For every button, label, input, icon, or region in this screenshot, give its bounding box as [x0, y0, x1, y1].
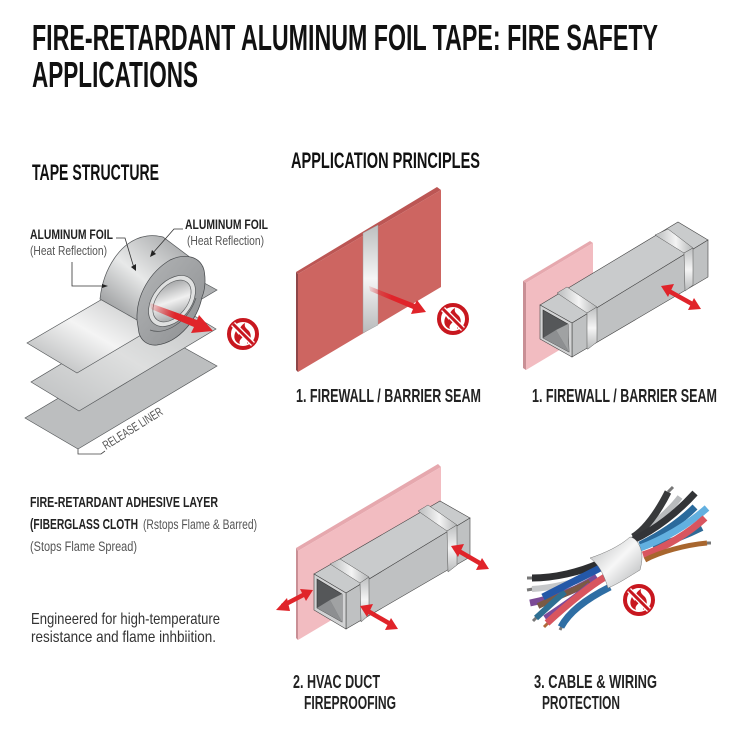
tape sleeve: [590, 537, 642, 588]
callout: aluminum foil right: ALUMINUM FOIL: [185, 216, 268, 232]
label: [534, 672, 657, 713]
tape bands: [330, 505, 457, 622]
arrow: right: [451, 544, 489, 570]
callout: aluminum foil left: [30, 226, 136, 288]
label: PROTECTION: [542, 693, 620, 713]
arrow: double-headed: [661, 284, 701, 310]
tape strip: [363, 225, 378, 333]
text block: engineered note: Engineered for high-temperature: [31, 611, 220, 628]
firewall panel: [296, 187, 441, 372]
text block: engineered note: resistance and flame inhbiition.: [31, 629, 216, 646]
wall: [296, 464, 441, 640]
duct: [314, 501, 470, 629]
arrow: heat: [369, 286, 426, 314]
foil roll: [100, 236, 205, 345]
title: [32, 17, 658, 95]
label: [293, 672, 396, 713]
panel: cable and wiring protection: [527, 487, 711, 713]
callout: aluminum foil right: (Heat Reflection): [187, 233, 264, 248]
callout: release liner: RELEASE LINER: [100, 405, 165, 453]
label: FIREPROOFING: [304, 693, 396, 713]
callout: aluminum foil left: ALUMINUM FOIL: [30, 226, 113, 242]
heading: tape structure: TAPE STRUCTURE: [32, 160, 159, 185]
arrow: left: [276, 589, 313, 611]
text block: adhesive layer: (Rstops Flame & Barred): [143, 517, 257, 532]
tape bands: [557, 229, 693, 349]
arrow: heat through tape: [150, 303, 213, 333]
text block: engineered note: [31, 611, 220, 646]
label: 2. HVAC DUCT: [293, 672, 380, 692]
text block: adhesive layer: (Stops Flame Spread): [30, 539, 137, 554]
layer: top foil sheet: [27, 262, 217, 373]
text block: adhesive layer: (FIBERGLASS CLOTH: [30, 516, 138, 533]
panel: HVAC duct fireproofing: [276, 464, 489, 713]
cable bundle: [530, 492, 707, 627]
icon: no fire: [229, 320, 257, 348]
cable tips: [527, 487, 711, 630]
callout: aluminum foil right: [150, 216, 268, 257]
text block: adhesive layer: FIRE-RETARDANT ADHESIVE LAYER: [30, 494, 218, 511]
arrow: center: [360, 604, 398, 630]
wall: [523, 241, 593, 370]
duct: [540, 222, 708, 357]
icon: no fire: [439, 305, 467, 333]
heading: application principles: APPLICATION PRINCIPLES: [291, 148, 480, 173]
label: 3. CABLE & WIRING: [534, 672, 657, 692]
layer: release liner sheet: [25, 336, 217, 449]
layer: adhesive sheet: [31, 300, 216, 411]
panel: tape structure diagram: [25, 216, 268, 454]
icon: no fire: [625, 586, 653, 614]
panel: firewall seam: [296, 187, 481, 406]
title: APPLICATIONS: [32, 54, 198, 95]
panel: duct through wall: [523, 222, 717, 406]
label: 1. FIREWALL / BARRIER SEAM: [296, 386, 481, 406]
text block: adhesive layer: [30, 494, 257, 554]
callout: release liner: [78, 405, 165, 454]
callout: aluminum foil left: (Heat Reflection): [30, 243, 107, 258]
